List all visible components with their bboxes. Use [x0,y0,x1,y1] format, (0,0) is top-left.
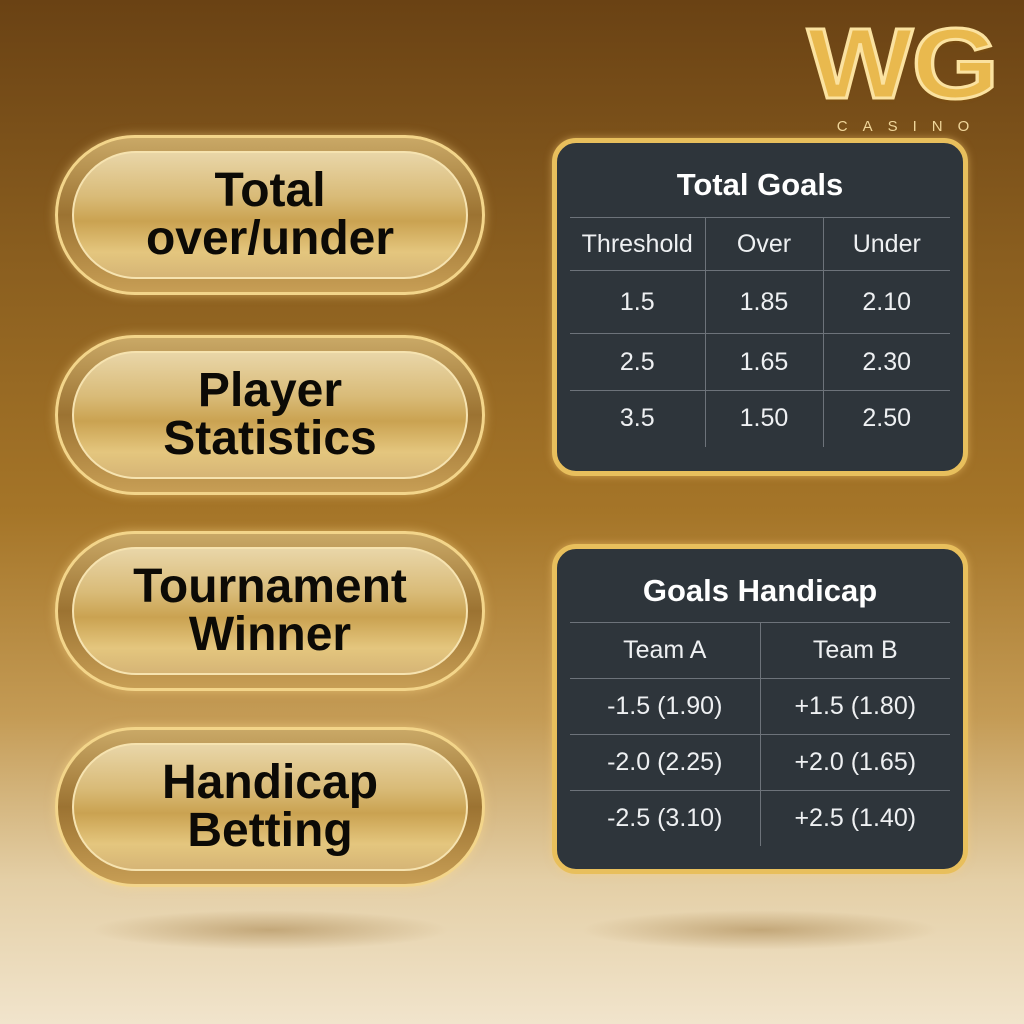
panel: goals handicap [552,544,968,874]
table: total goals [570,217,950,447]
table: total goals: 2.50 [862,404,911,432]
table: total goals: 3.5 [620,404,655,432]
pill: handicap betting: Betting [187,804,353,857]
table: goals handicap: -2.0 (2.25) [607,748,722,776]
table: total goals: 2.30 [862,348,911,376]
panel: total goals [552,138,968,476]
table: total goals: 1.50 [740,404,788,432]
table: total goals: Under [853,230,921,258]
table: goals handicap: +2.5 (1.40) [794,804,916,832]
table: goals handicap: +2.0 (1.65) [794,748,916,776]
table: goals handicap: Team B [813,636,898,664]
pill: handicap betting [55,727,485,887]
pill: player statistics [55,335,485,495]
heading: total goals: Total Goals [677,167,843,202]
pill: tournament winner [55,531,485,691]
table: goals handicap: -2.5 (3.10) [607,804,722,832]
table: total goals: 1.85 [740,288,788,316]
heading: goals handicap: Goals Handicap [643,573,877,608]
pill: handicap betting: Handicap [162,756,378,809]
table: goals handicap: Team A [623,636,706,664]
pill: total over/under: Total [214,164,326,217]
pill: tournament winner: Winner [189,608,351,661]
logo: WG [807,8,998,120]
logo: CASINO [837,118,984,135]
pill: total over/under: over/under [146,212,394,265]
pill: player statistics: Statistics [163,412,377,465]
table: goals handicap: +1.5 (1.80) [794,692,916,720]
pill: total over/under [55,135,485,295]
table: total goals: 2.5 [620,348,655,376]
table: total goals: 1.5 [620,288,655,316]
table: total goals: Over [737,230,791,258]
pill: player statistics: Player [198,364,342,417]
pill: tournament winner: Tournament [133,560,407,613]
table: total goals: Threshold [582,230,693,258]
table: total goals: 1.65 [740,348,788,376]
table: goals handicap: -1.5 (1.90) [607,692,722,720]
table: goals handicap [570,622,950,846]
table: total goals: 2.10 [862,288,911,316]
